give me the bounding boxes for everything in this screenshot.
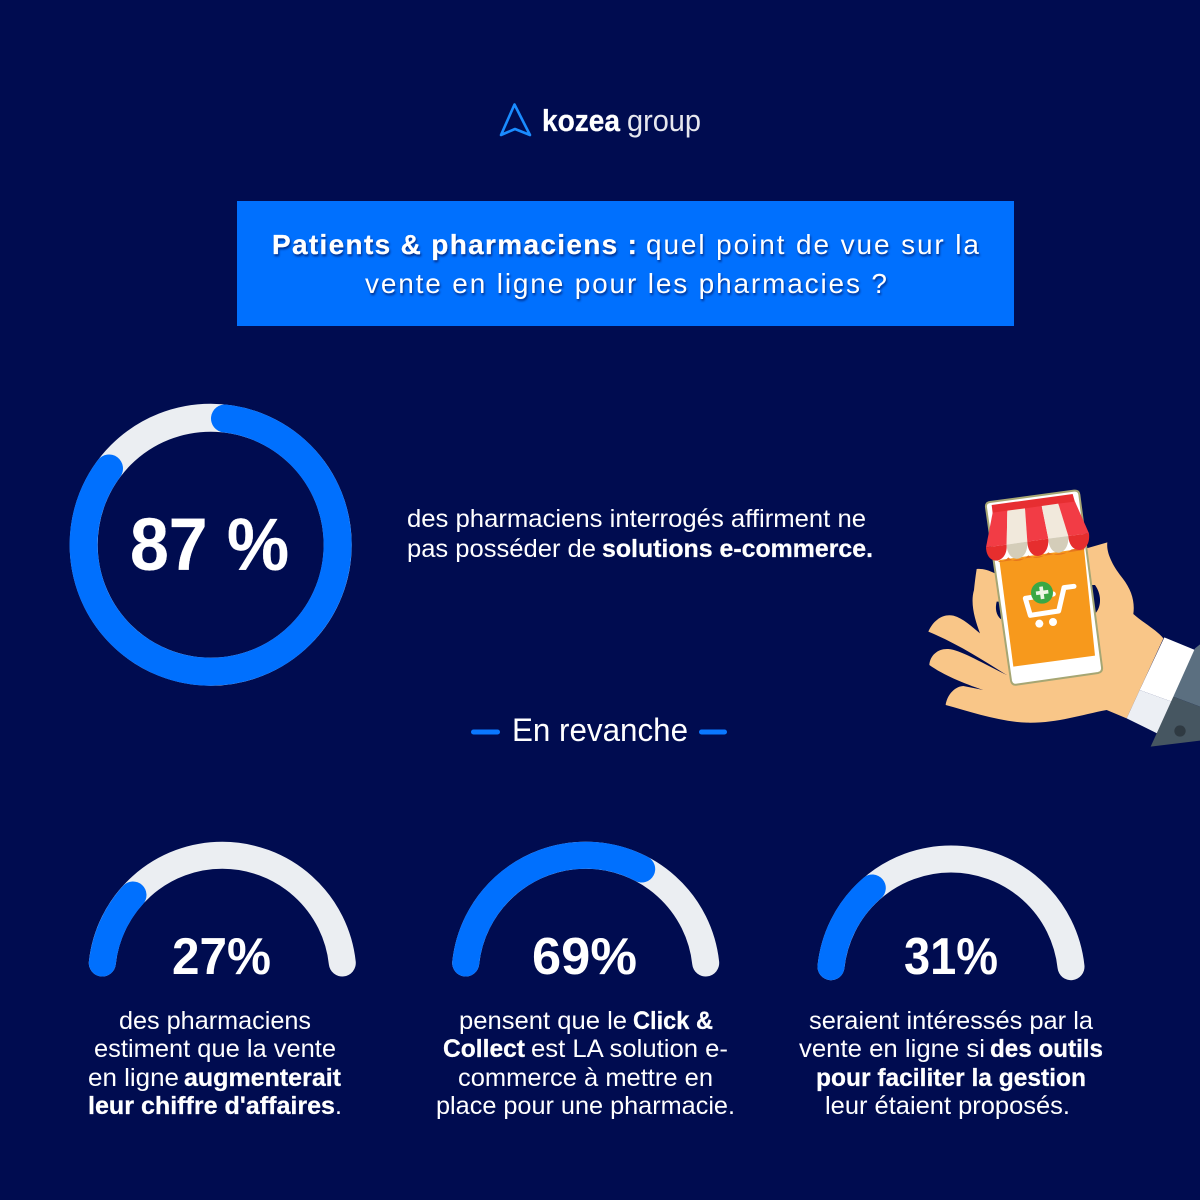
text block: 27% description: leur chiffre d'affaires (88, 1092, 335, 1120)
text block: 87 % description: solutions e-commerce. (602, 535, 873, 563)
text block: 87 % description: pas posséder de (407, 535, 596, 563)
text block: 69% description: pensent que le (459, 1007, 627, 1035)
text block: 69% description: place pour une pharmacie. (436, 1092, 735, 1120)
donut value: 87 % (130, 503, 289, 586)
text block: 31% description (799, 1007, 1103, 1120)
icon: shopping cart (1025, 582, 1074, 628)
text block: 87 % description: des pharmaciens interrogés affirment ne (407, 505, 866, 533)
text block: 27% description (88, 1007, 342, 1120)
text block: 27% description: en ligne (88, 1064, 179, 1092)
gauge value: 69% (532, 928, 637, 986)
logo: kozea group (501, 103, 701, 138)
text block: 69% description (436, 1007, 735, 1120)
icon: navigation arrow (501, 104, 530, 135)
text block: 31% description: vente en ligne si (799, 1035, 985, 1063)
text block: 69% description: Collect (443, 1035, 526, 1063)
jacket sleeve (1151, 644, 1200, 747)
text block: 31% description: des outils (990, 1035, 1103, 1063)
text block: 27% description: estiment que la vente (94, 1035, 336, 1063)
text block: 31% description: pour faciliter la gestion (816, 1064, 1086, 1092)
donut chart: 87 % (84, 418, 338, 672)
gauge: 27% (102, 855, 342, 986)
gauge value: 27% (172, 928, 271, 986)
text block: 69% description: est LA solution e- (531, 1035, 728, 1063)
text block: 27% description: . (335, 1092, 342, 1120)
hand (928, 542, 1163, 723)
gauge: 69% (466, 855, 706, 986)
text block: 69% description: commerce à mettre en (458, 1064, 713, 1092)
text block: 69% description: Click & (633, 1007, 713, 1035)
title line 2: vente en ligne pour les pharmacies ? (365, 268, 887, 299)
phone (986, 491, 1102, 685)
title line 1 bold: Patients & pharmaciens : (272, 229, 637, 260)
logo wordmark: kozea: kozea (542, 103, 621, 138)
shop awning (986, 494, 1089, 562)
section heading: En revanche: En revanche (512, 712, 688, 748)
illustration: hand holding phone shop (928, 491, 1200, 747)
text block: 27% description: des pharmaciens (119, 1007, 311, 1035)
icon: green plus badge (1031, 582, 1053, 604)
logo wordmark: group: group (627, 103, 701, 138)
title banner (237, 201, 1014, 326)
shirt cuff (1127, 637, 1195, 734)
gauge: 31% (831, 859, 1071, 986)
text block: 31% description: leur étaient proposés. (825, 1092, 1070, 1120)
text block: 27% description: augmenterait (184, 1064, 342, 1092)
text block: 87 % description (407, 505, 873, 563)
phone screen (999, 548, 1095, 667)
title line 1 regular: quel point de vue sur la (646, 229, 979, 260)
text block: 31% description: seraient intéressés par la (809, 1007, 1093, 1035)
gauge value: 31% (904, 928, 998, 986)
